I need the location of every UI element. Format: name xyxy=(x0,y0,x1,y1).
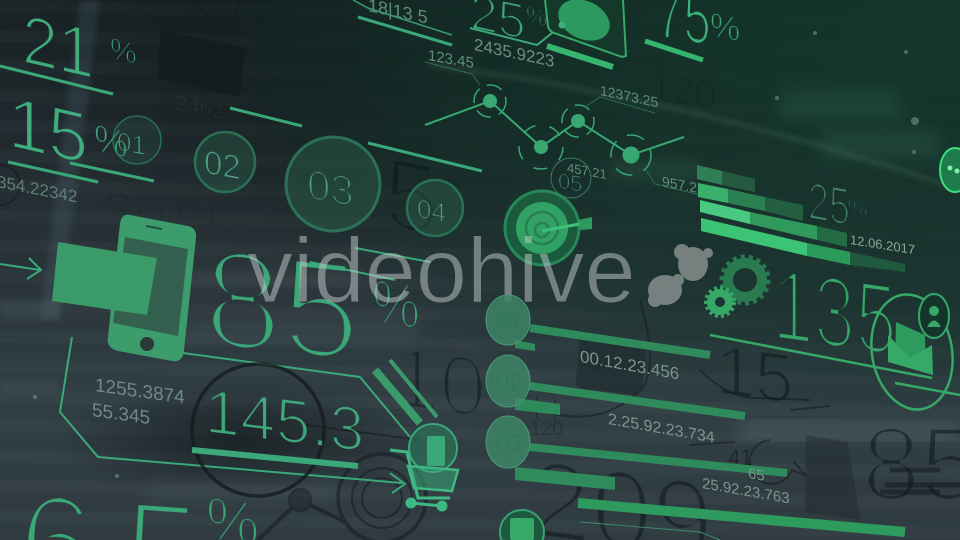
numbered circles: 01 xyxy=(117,126,146,161)
green progress rows: 01 xyxy=(496,308,523,335)
dim numbers: 120 xyxy=(650,64,717,118)
left percentages: 15 xyxy=(8,82,88,180)
timers: 00.12.23.456 xyxy=(580,346,679,383)
bar chart right xyxy=(697,165,905,272)
right percent: % xyxy=(848,194,868,222)
top numbers: 123.45 xyxy=(428,47,474,72)
green progress rows: 03 xyxy=(496,430,523,457)
timers: 2.25.92.23.734 xyxy=(608,410,715,447)
numbered circles: 02 xyxy=(204,144,241,187)
watermark logo xyxy=(648,244,713,307)
left data values: 1255.3874 xyxy=(95,375,185,409)
connector lines xyxy=(60,337,410,493)
right percent: 12.06.2017 xyxy=(850,232,915,257)
line chart: 12373.25 xyxy=(600,82,658,110)
left data values xyxy=(92,375,185,429)
icon: shopping cart xyxy=(390,424,458,512)
bottom bar and double bars xyxy=(192,360,437,466)
icon: top pie chart tablet xyxy=(545,0,626,67)
dim numbers xyxy=(100,64,960,540)
numbered circles: 03 xyxy=(307,160,354,215)
line chart xyxy=(425,82,705,198)
left percentages: % xyxy=(110,31,137,71)
dim numbers: 10% xyxy=(392,329,562,448)
green progress rows: 02 xyxy=(496,369,523,396)
circled mail and user icons xyxy=(710,288,960,416)
dim numbers: 2462 xyxy=(175,90,224,124)
left percentages: % xyxy=(94,116,128,167)
line chart: 957.23 xyxy=(662,173,705,197)
numbered circles: 04 xyxy=(417,193,446,228)
gears xyxy=(706,257,768,316)
circle 145.3: 145.3 xyxy=(205,377,365,466)
dim numbers: 120 xyxy=(530,418,563,440)
dim numbers: 5 xyxy=(384,137,440,258)
circle 145.3 xyxy=(192,364,365,496)
line chart: 05 xyxy=(558,168,582,197)
big 85 percent: 85 xyxy=(204,218,360,391)
arrow left xyxy=(0,258,41,279)
left percentages xyxy=(0,0,482,182)
dim numbers: 15 xyxy=(716,329,794,419)
big 85 percent: % xyxy=(372,267,420,343)
line chart: 457.21 xyxy=(567,160,607,182)
top numbers xyxy=(353,0,740,85)
icon: chat bubble xyxy=(940,148,960,192)
timers: 25.92.23.763 xyxy=(702,475,790,507)
numbered circles xyxy=(113,116,463,236)
green progress rows xyxy=(486,295,905,540)
large number 135: 135 xyxy=(772,248,897,377)
right percent: 25 xyxy=(808,172,850,237)
right percent xyxy=(808,172,915,257)
icon: target xyxy=(505,191,592,265)
big 85 percent xyxy=(204,218,430,391)
dim numbers: 41 xyxy=(728,445,752,470)
top numbers: 2435.9223 xyxy=(474,34,554,71)
dim numbers: 32.25.734 xyxy=(100,184,216,230)
timers xyxy=(580,346,790,507)
timers: 65 xyxy=(748,465,765,485)
left percentages: 21 xyxy=(22,0,94,94)
left data values: 55.345 xyxy=(92,400,150,429)
icon: phone and credit card xyxy=(52,215,196,361)
top numbers: % xyxy=(710,6,740,49)
watermark: videohive xyxy=(247,220,636,322)
top numbers: % xyxy=(526,1,547,32)
